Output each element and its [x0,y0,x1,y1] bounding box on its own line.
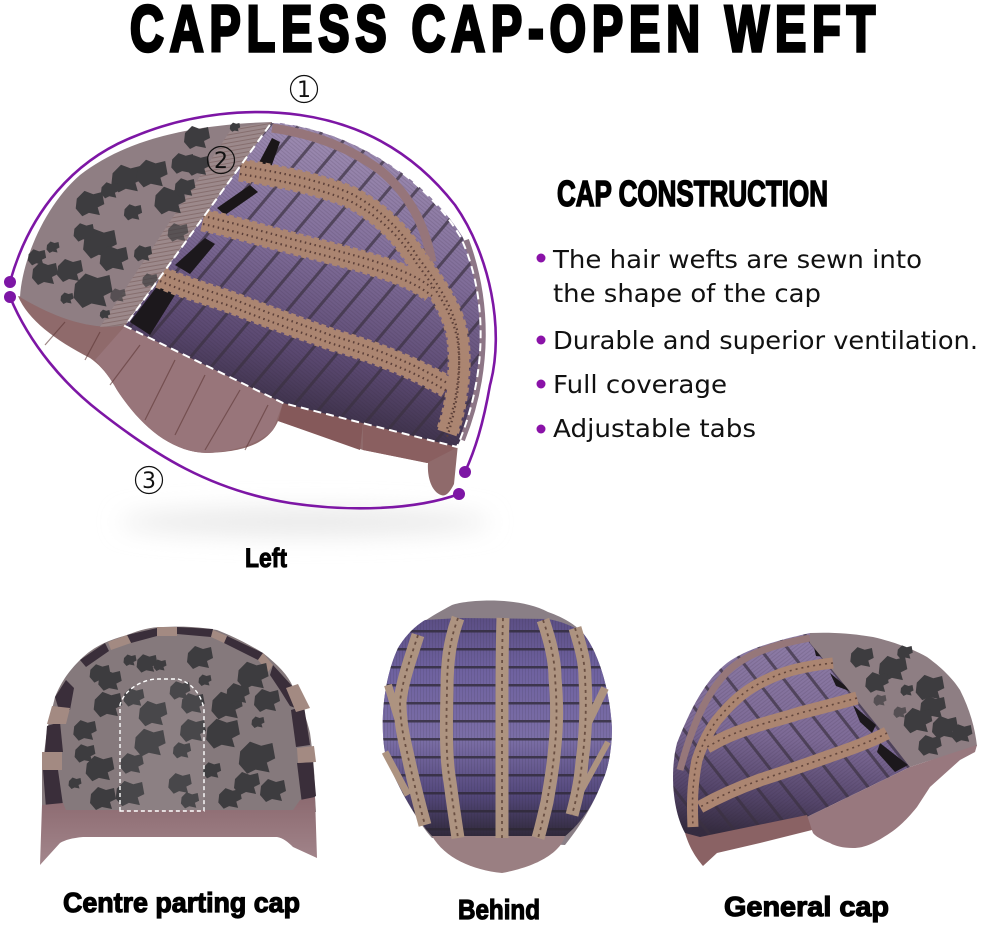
vertical lace strips [385,618,608,838]
general cap illustration [673,633,977,866]
bullet 1: the shape of the cap [553,279,821,308]
label: general cap: General cap [724,891,889,922]
bullet list [536,245,978,443]
cap shadow [120,509,490,535]
lace strips [692,663,887,827]
number 1 [290,76,318,103]
cap band and ear flap [18,296,458,495]
edge weft patches and lace strips [42,627,316,808]
lace panel [20,122,272,327]
lace strips [160,128,483,440]
lace panel [810,633,977,767]
number 1: 1 [297,78,311,103]
purple measure line 1 [4,112,496,478]
purple measure line 3 [4,291,465,508]
bullet 3: Full coverage [553,370,727,399]
bullet 1: The hair wefts are sewn into [552,245,922,274]
number 3 [136,466,162,494]
open weft section [125,122,485,447]
dashed parting area [120,679,204,811]
centre parting cap illustration [40,627,317,865]
number 2: 2 [214,149,228,174]
label: left: Left [245,543,287,573]
heading: cap construction: CAP CONSTRUCTION [557,173,828,214]
flap and band [685,745,977,866]
behind cap illustration [383,601,612,873]
bullet 1 [536,245,922,308]
outer cap band [680,638,810,770]
label: centre parting cap: Centre parting cap [63,887,300,918]
bullet 2: Durable and superior ventilation. [553,326,978,355]
lace motifs [68,646,286,810]
cap band [40,797,317,865]
number 2 [208,146,234,174]
main cap illustration [18,122,490,535]
label: behind: Behind [458,894,540,925]
dashed white outline of open weft [125,122,481,447]
bullet 4: Adjustable tabs [553,414,756,443]
number 3: 3 [142,469,156,494]
open weft area [673,633,910,840]
bottom band [432,836,565,873]
